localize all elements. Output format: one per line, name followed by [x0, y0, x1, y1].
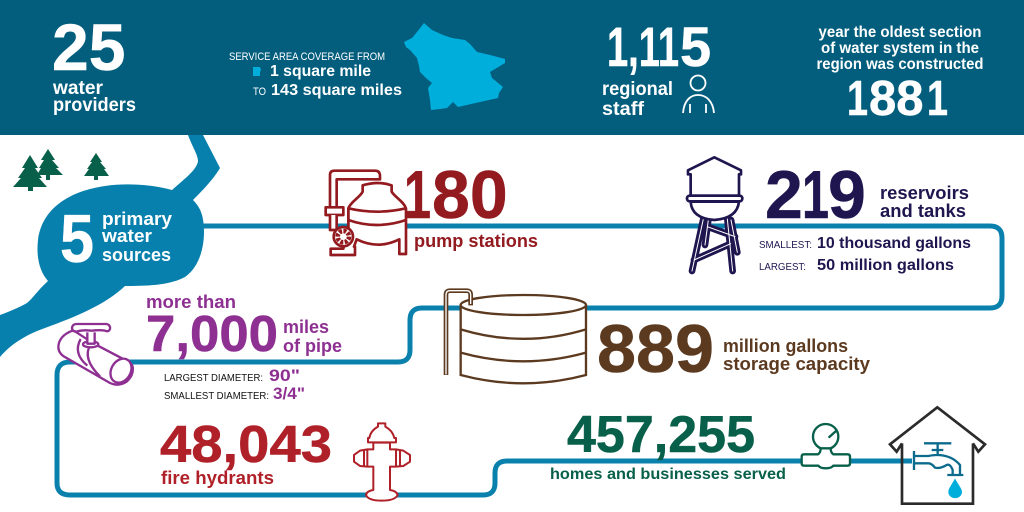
- stat: 5 primary water sources: [60, 201, 172, 277]
- stat: 5 primary water sources: primary: [102, 209, 172, 229]
- stat: service area coverage: TO: [253, 86, 266, 98]
- stat: 457,255 homes and businesses served: 457,255: [567, 406, 755, 464]
- stat: 25 water providers: 25: [52, 10, 125, 84]
- house outline: [890, 407, 985, 504]
- icon: fire hydrant: [354, 423, 410, 501]
- stat: 7,000 miles of pipe: 90": [269, 366, 300, 385]
- text: pipe diameter labels: SMALLEST DIAMETER:: [164, 391, 269, 402]
- icon: pipe and valve: [58, 324, 136, 386]
- stat: 219 reservoirs and tanks: reservoirs: [880, 183, 969, 203]
- stat: 25 water providers: water: [52, 78, 104, 99]
- stat: oldest section 1881: 1: [927, 72, 948, 126]
- stat: 180 pump stations: 1: [404, 157, 431, 233]
- stat: 889 million gallons storage capacity: million gallons: [723, 336, 848, 356]
- stat: 219 reservoirs and tanks: 10 thousand gallons: [817, 235, 971, 252]
- icon: pressure gauge: [802, 424, 850, 468]
- text: pipe diameter labels: [164, 373, 269, 402]
- icon: pine trees: [13, 149, 109, 191]
- stat: 219 reservoirs and tanks: 2: [765, 157, 803, 233]
- stat: service area coverage: 143 square miles: [271, 82, 402, 99]
- icon: house with faucet: [890, 407, 985, 504]
- stat: 1,115 regional staff: regional: [602, 79, 673, 100]
- stat: 219 reservoirs and tanks: 1: [802, 157, 829, 233]
- icon: service area map: [404, 23, 505, 110]
- stat: 180 pump stations: pump stations: [414, 231, 538, 251]
- stat: 5 primary water sources: 5: [60, 201, 94, 277]
- stat: 25 water providers: providers: [53, 95, 136, 116]
- stat: 219 reservoirs and tanks: 50 million gallons: [817, 257, 954, 274]
- stat: 7,000 miles of pipe: [146, 292, 342, 403]
- stat: 7,000 miles of pipe: of pipe: [283, 336, 342, 356]
- stat: 219 reservoirs and tanks: and tanks: [880, 201, 966, 221]
- stat: 219 reservoirs and tanks: 9: [828, 157, 866, 233]
- stat: 7,000 miles of pipe: 3/4": [273, 384, 305, 403]
- stat: 457,255 homes and businesses served: [550, 406, 786, 483]
- stat: 25 water providers: [52, 10, 136, 116]
- stat: 5 primary water sources: water: [101, 226, 152, 246]
- stat: 219 reservoirs and tanks: SMALLEST:: [759, 240, 812, 251]
- icon: person: [683, 76, 714, 113]
- stat: service area coverage: SERVICE AREA COVERAGE FROM: [229, 51, 385, 63]
- faucet: [914, 443, 963, 475]
- stat: 48,043 fire hydrants: 48,043: [160, 416, 332, 474]
- stat: oldest section 1881: 1: [847, 72, 868, 126]
- stat: service area coverage: 1 square mile: [270, 63, 371, 80]
- stat: 889 million gallons storage capacity: [597, 311, 870, 387]
- stat: service area coverage: [229, 51, 402, 99]
- stat: 1,115 regional staff: 1,11: [607, 15, 679, 78]
- stat: oldest section 1881: year the oldest section: [818, 24, 982, 41]
- stat: 219 reservoirs and tanks: LARGEST:: [759, 262, 806, 273]
- pipeline route: [57, 226, 1002, 495]
- text: pipe diameter labels: LARGEST DIAMETER:: [164, 373, 263, 384]
- stat: 219 reservoirs and tanks: [759, 157, 971, 274]
- stat: oldest section 1881: 88: [869, 72, 924, 126]
- stat: 1,115 regional staff: 5: [680, 15, 711, 78]
- stat: oldest section 1881: of water system in the: [821, 40, 979, 57]
- stat: oldest section 1881: region was constructed: [816, 56, 984, 73]
- river and lake: [0, 135, 220, 357]
- panel: header band: [0, 0, 1024, 135]
- stat: 7,000 miles of pipe: more than: [146, 292, 236, 312]
- stat: 180 pump stations: 80: [432, 157, 508, 233]
- water drop: [948, 478, 962, 498]
- icon: water tower: [687, 157, 742, 271]
- stat: 889 million gallons storage capacity: storage capacity: [723, 354, 870, 374]
- stat: 5 primary water sources: sources: [102, 245, 171, 265]
- stat: oldest section 1881: [816, 24, 984, 126]
- stat: 1,115 regional staff: staff: [602, 99, 645, 120]
- icon: pump station: [326, 171, 406, 255]
- stat: 457,255 homes and businesses served: homes and businesses served: [550, 466, 786, 483]
- stat: 889 million gallons storage capacity: 889: [597, 311, 714, 387]
- stat: 1,115 regional staff: [602, 15, 711, 120]
- icon: storage tank: [446, 291, 586, 383]
- stat: 7,000 miles of pipe: 7,000: [146, 305, 278, 362]
- stat: 48,043 fire hydrants: fire hydrants: [161, 468, 274, 488]
- stat: 180 pump stations: [404, 157, 538, 251]
- stat: 7,000 miles of pipe: miles: [283, 317, 329, 337]
